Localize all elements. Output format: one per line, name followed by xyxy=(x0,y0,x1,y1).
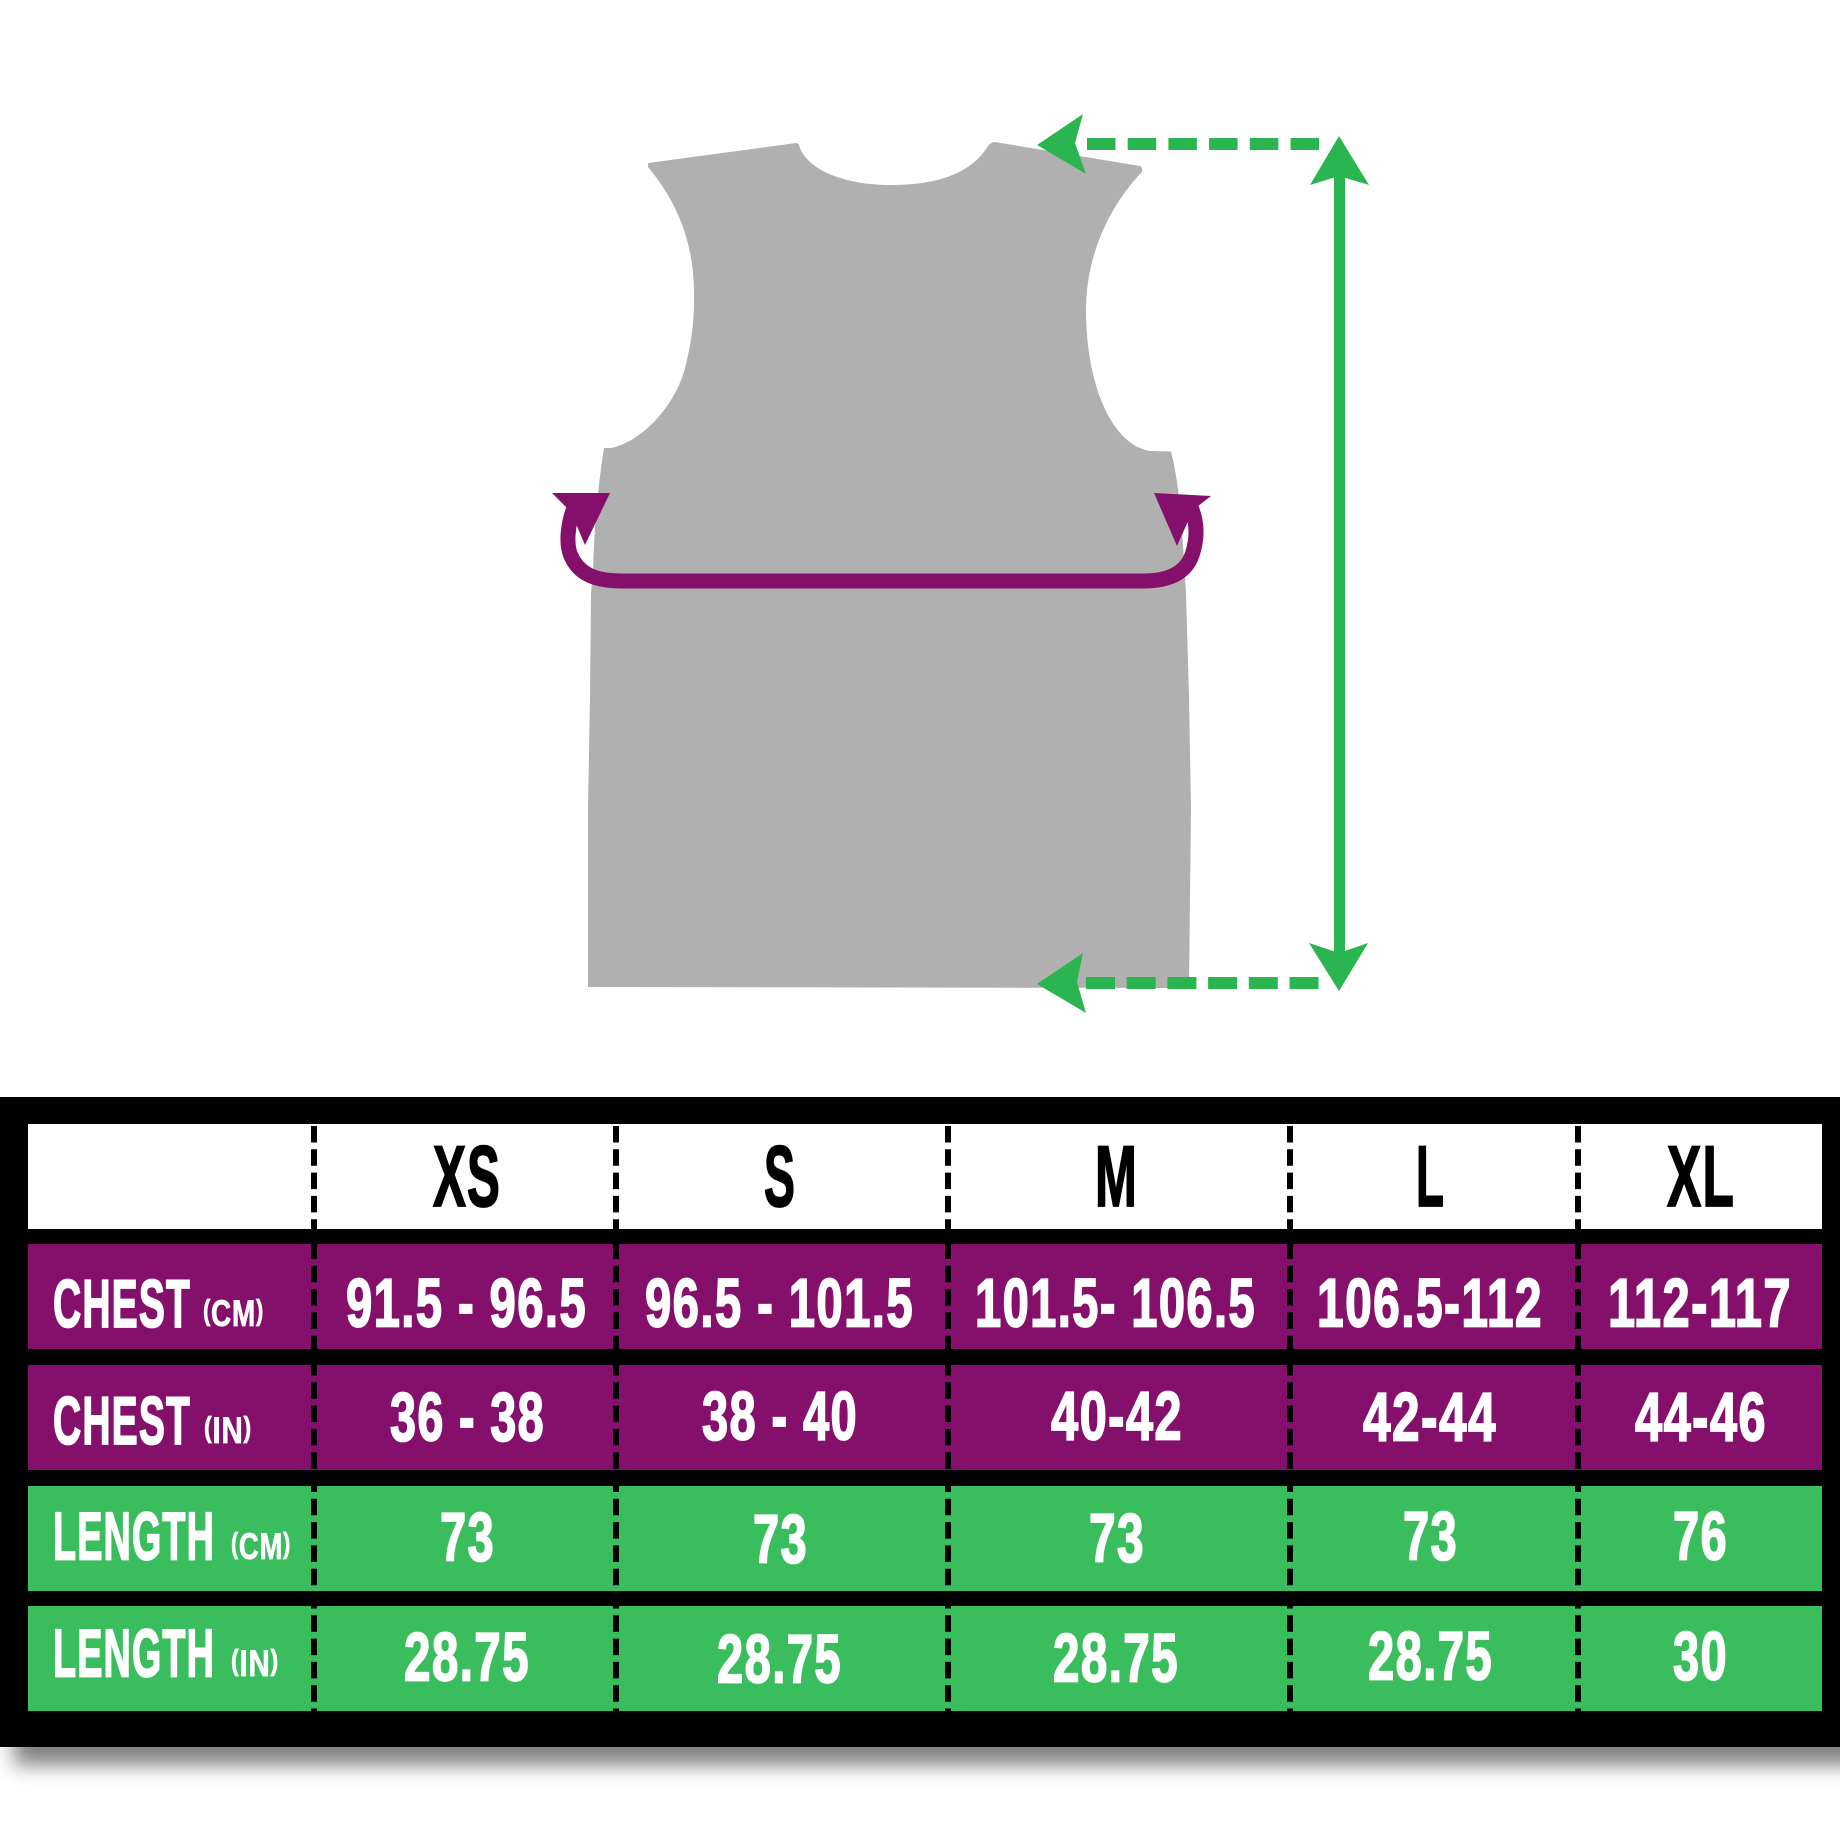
value XL: 30 xyxy=(1673,1618,1728,1694)
value L: 42-44 xyxy=(1363,1378,1497,1456)
size table xyxy=(0,1097,1840,1765)
row label: length in: ) xyxy=(271,1645,279,1677)
row label: length cm: CM xyxy=(239,1526,283,1567)
length cm row xyxy=(28,1486,1822,1591)
value XS: 73 xyxy=(440,1498,495,1576)
row label: chest cm: ) xyxy=(256,1295,264,1327)
value L: 73 xyxy=(1403,1498,1458,1574)
value M: 28.75 xyxy=(1053,1620,1179,1696)
size XS: XS xyxy=(433,1129,501,1225)
size XL: XL xyxy=(1667,1129,1735,1225)
row label: chest cm: ( xyxy=(203,1295,211,1327)
row label: length in: LENGTH xyxy=(53,1616,215,1692)
row label: chest in: CHEST xyxy=(53,1383,191,1459)
length measurement arrow xyxy=(1309,136,1369,991)
vest measurement diagram xyxy=(552,114,1369,1013)
size L: L xyxy=(1416,1129,1445,1225)
row label: length in: ( xyxy=(231,1645,239,1677)
row label: chest cm: CHEST xyxy=(53,1266,191,1342)
row label: chest in: IN xyxy=(212,1410,244,1451)
row label: length in: IN xyxy=(239,1643,271,1684)
chest measurement arrow xyxy=(552,493,1211,581)
row label: chest cm: CM xyxy=(211,1293,256,1334)
row label: length cm: ) xyxy=(283,1528,291,1560)
table frame xyxy=(0,1097,1840,1747)
value M: 40-42 xyxy=(1051,1378,1183,1454)
table shadow xyxy=(14,1700,1840,1765)
size M: M xyxy=(1095,1129,1138,1225)
header row xyxy=(28,1124,1822,1229)
size S: S xyxy=(764,1129,796,1225)
value XS: 28.75 xyxy=(404,1618,530,1696)
value S: 73 xyxy=(753,1500,808,1578)
value XL: 44-46 xyxy=(1635,1378,1767,1456)
row label: chest in: ) xyxy=(244,1412,252,1444)
value L: 28.75 xyxy=(1368,1618,1493,1694)
chest in row xyxy=(28,1365,1822,1470)
row label: length cm: LENGTH xyxy=(53,1498,215,1574)
top dashed guide xyxy=(1037,114,1319,174)
row label: chest in: ( xyxy=(204,1412,212,1444)
value M: 101.5- 106.5 xyxy=(975,1264,1256,1342)
row label: length cm: ( xyxy=(231,1528,239,1560)
value XS: 91.5 - 96.5 xyxy=(346,1264,587,1342)
value S: 28.75 xyxy=(717,1620,842,1698)
value S: 96.5 - 101.5 xyxy=(645,1264,914,1342)
vest silhouette xyxy=(588,142,1191,988)
value XL: 76 xyxy=(1673,1498,1728,1574)
length in row xyxy=(28,1606,1822,1711)
value XS: 36 - 38 xyxy=(390,1378,545,1456)
value M: 73 xyxy=(1089,1500,1145,1576)
value S: 38 - 40 xyxy=(702,1378,858,1454)
chest cm row xyxy=(28,1244,1822,1349)
value L: 106.5-112 xyxy=(1317,1264,1543,1342)
bottom dashed guide xyxy=(1037,953,1318,1013)
